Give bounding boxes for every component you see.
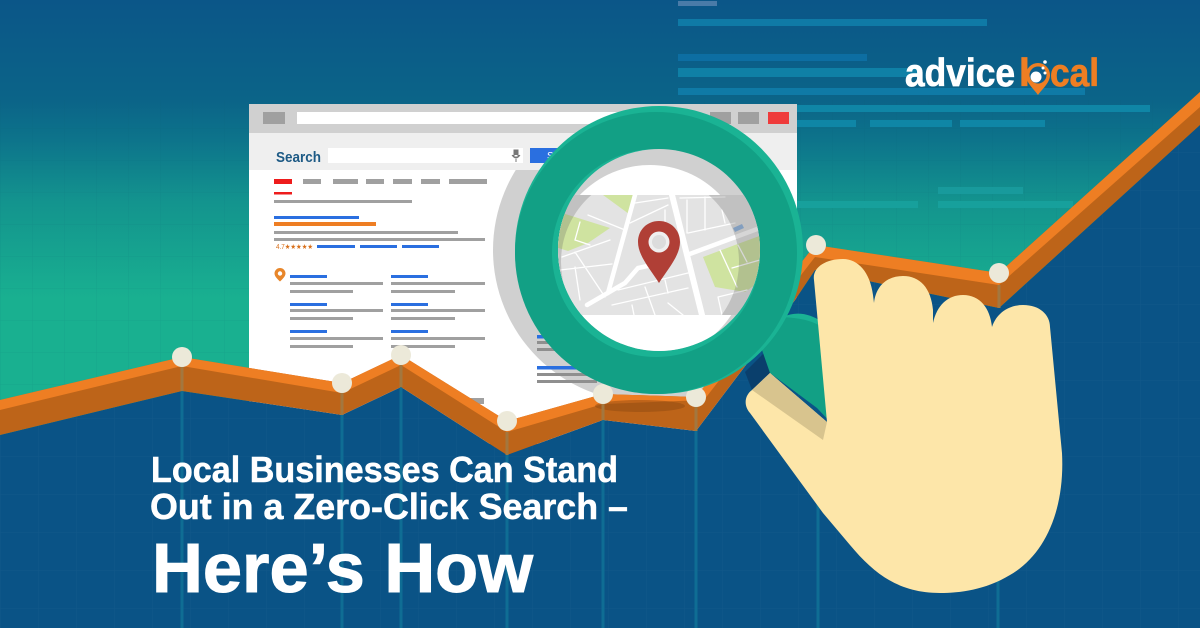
title bbox=[150, 449, 628, 607]
logo: advice local: cal bbox=[1050, 52, 1099, 95]
background gradient bbox=[0, 0, 1200, 440]
browser title bar bbox=[249, 104, 797, 133]
lens with map bbox=[558, 149, 760, 351]
title: Out in a Zero-Click Search – bbox=[150, 486, 628, 527]
lower results on shadow bbox=[537, 335, 702, 383]
chart drop lines bbox=[182, 387, 998, 628]
logo: advice local: advice bbox=[905, 52, 1015, 95]
search band bbox=[249, 133, 797, 170]
title: Local Businesses Can Stand bbox=[151, 449, 618, 490]
logo: advice local: l bbox=[1019, 52, 1030, 95]
top search result bbox=[274, 216, 485, 251]
logo: advice local bbox=[905, 52, 1099, 95]
search band: S bbox=[547, 151, 554, 162]
chart data points bbox=[172, 235, 1009, 431]
decorative code bars top right bbox=[678, 1, 1150, 208]
hand bbox=[746, 259, 1062, 593]
search result tabs bbox=[274, 179, 487, 203]
top search result: 4.7★★★★★ bbox=[276, 243, 313, 251]
magnifying glass handle bbox=[745, 314, 832, 424]
line chart ribbon bbox=[0, 92, 1200, 455]
lens shading bbox=[558, 195, 760, 315]
map bbox=[555, 195, 762, 315]
magnifying glass bbox=[515, 106, 803, 394]
thumb shadow bbox=[752, 373, 827, 440]
local result listings bbox=[290, 275, 485, 404]
search band: Search bbox=[276, 149, 321, 166]
browser window bbox=[249, 98, 797, 444]
icon: red map pin bbox=[638, 221, 680, 283]
magnifier shadow circle bbox=[493, 170, 704, 396]
icon: local result pin bbox=[274, 268, 286, 282]
icon: logo pin bbox=[1026, 60, 1050, 95]
title: Here’s How bbox=[152, 529, 534, 607]
